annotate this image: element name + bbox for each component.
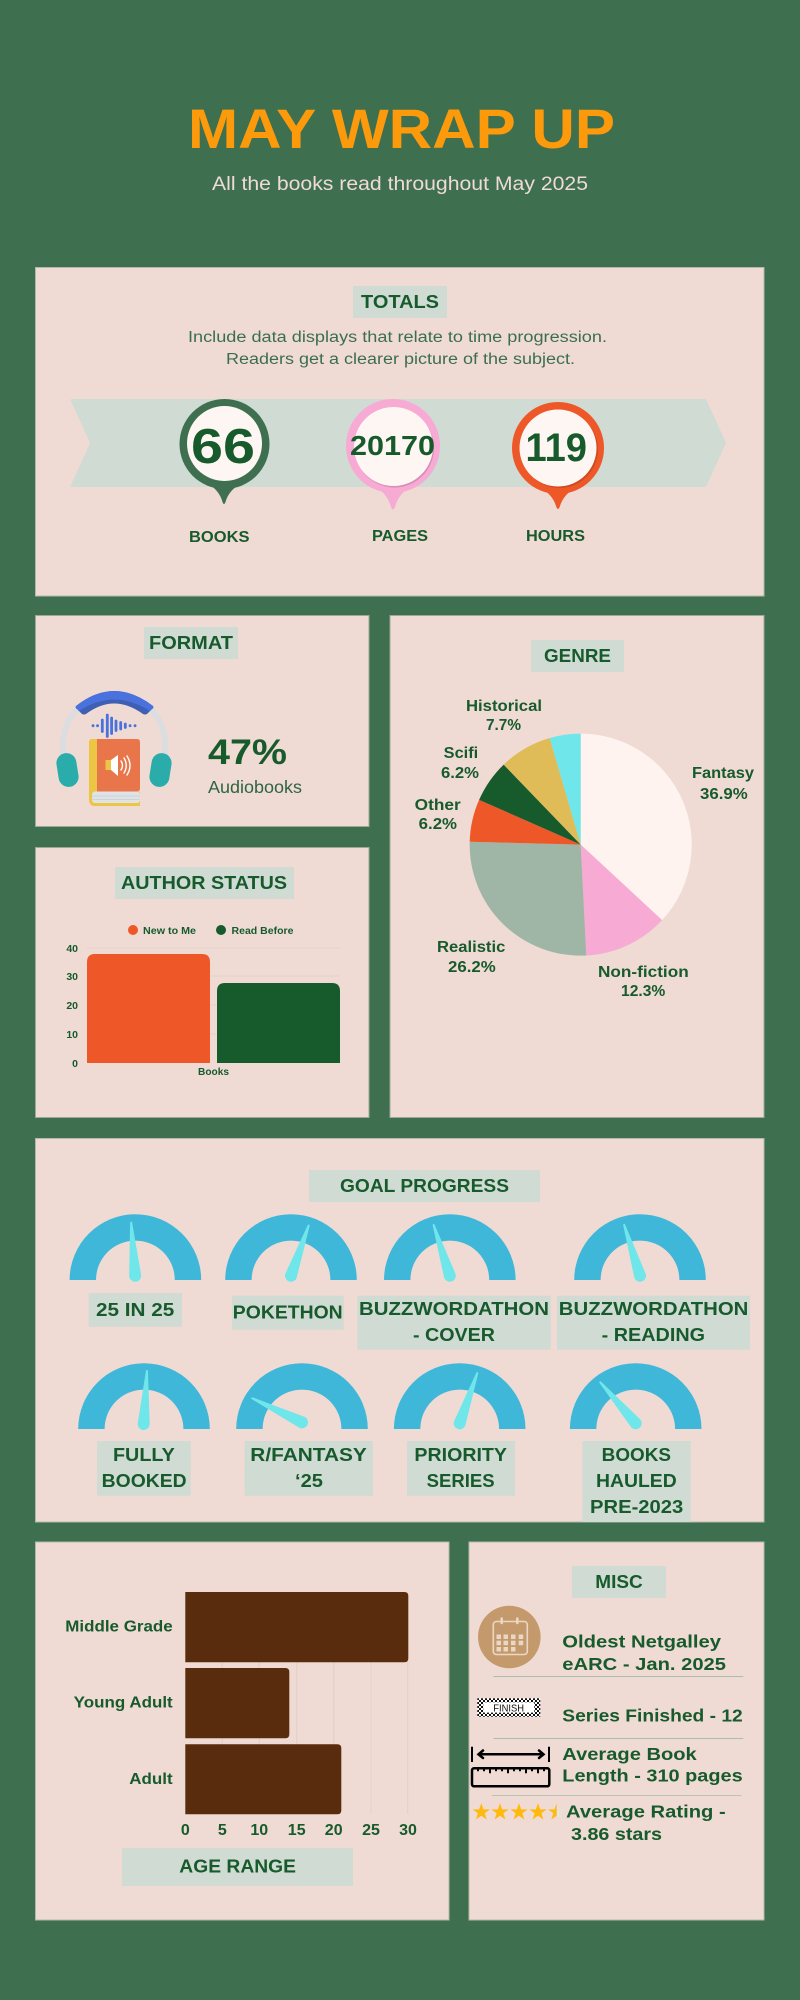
pie label: scifi: Scifi — [444, 745, 478, 762]
text: average book length: Average Book — [562, 1744, 697, 1764]
pie label: scifi: 6.2% — [441, 765, 479, 782]
bar chart: author status — [66, 943, 340, 1078]
label: buzzwordathon cover: - COVER — [413, 1325, 495, 1345]
bar chart: author status: 0 — [72, 1058, 78, 1070]
text: average rating: Average Rating - — [566, 1802, 726, 1822]
label: pokethon — [232, 1296, 344, 1330]
pie label: historical: 7.7% — [486, 717, 521, 734]
pie label: fantasy: 36.9% — [700, 786, 748, 803]
gauge: buzzwordathon reading — [574, 1214, 706, 1283]
text: average rating — [566, 1802, 726, 1844]
label: 25 in 25: 25 IN 25 — [96, 1300, 174, 1320]
bar chart: age range — [65, 1592, 417, 1839]
heading: age range — [122, 1848, 353, 1886]
text: average book length: Length - 310 pages — [562, 1766, 743, 1786]
pie label: non-fiction: 12.3% — [621, 983, 665, 1000]
panel: format — [36, 616, 369, 826]
icon: finish banner — [477, 1698, 540, 1717]
gauge: buzzwordathon cover — [384, 1214, 516, 1283]
stat: 47% audiobooks: 47% — [208, 733, 287, 772]
pie label: historical — [466, 698, 542, 734]
pin: pages — [346, 399, 440, 510]
label: fully booked: BOOKED — [102, 1471, 187, 1491]
bar chart: age range: 25 — [362, 1822, 380, 1839]
icon: audiobook with headphones — [55, 691, 173, 806]
gauge: pokethon — [225, 1214, 357, 1283]
bar chart: age range: 20 — [325, 1822, 343, 1839]
pie label: fantasy: Fantasy — [692, 765, 754, 782]
panel: genre — [390, 616, 764, 1118]
pin: hours: 119 — [526, 426, 587, 470]
stat: 47% audiobooks: Audiobooks — [208, 777, 302, 797]
chart legend — [128, 925, 294, 937]
gauge: priority series — [394, 1363, 526, 1431]
label: r/fantasy 25: ‘25 — [295, 1471, 323, 1491]
label: buzzwordathon reading: - READING — [602, 1325, 705, 1345]
description text: Readers get a clearer picture of the subject. — [226, 351, 575, 368]
panel: totals — [36, 268, 764, 596]
text: series finished: Series Finished - 12 — [562, 1706, 743, 1726]
label: books hauled pre-2023: HAULED — [596, 1471, 677, 1491]
bar chart: age range: 10 — [250, 1822, 268, 1839]
bar chart: age range: 15 — [288, 1822, 306, 1839]
heading: totals: TOTALS — [361, 292, 439, 312]
label: priority series: PRIORITY — [414, 1445, 507, 1465]
text: average book length — [562, 1744, 743, 1786]
bar chart: author status: 10 — [66, 1029, 78, 1041]
panel: author status — [36, 848, 369, 1118]
pie label: historical: Historical — [466, 698, 542, 715]
label: buzzwordathon reading — [557, 1296, 750, 1350]
heading: totals — [353, 286, 447, 318]
text: oldest netgalley — [562, 1632, 726, 1674]
text: average rating: 3.86 stars — [571, 1824, 662, 1844]
label: priority series: SERIES — [427, 1471, 495, 1491]
heading: goal progress: GOAL PROGRESS — [340, 1176, 509, 1196]
pie chart — [470, 734, 692, 956]
label: priority series — [407, 1441, 515, 1496]
text: oldest netgalley: eARC - Jan. 2025 — [562, 1654, 726, 1674]
label: hours: HOURS — [526, 528, 585, 545]
bar chart: author status: Books — [198, 1066, 229, 1078]
heading: genre: GENRE — [544, 646, 611, 666]
gauge: books hauled — [570, 1363, 702, 1432]
label: buzzwordathon cover: BUZZWORDATHON — [359, 1299, 549, 1319]
pie label: other — [415, 797, 461, 833]
pin: hours — [512, 402, 604, 509]
pin: books — [180, 399, 270, 504]
label: fully booked: FULLY — [113, 1445, 175, 1465]
pie label: non-fiction — [598, 964, 689, 1000]
stat: 47% audiobooks — [208, 733, 302, 797]
heading: goal progress — [309, 1170, 540, 1202]
pie label: realistic: 26.2% — [448, 959, 496, 976]
pie label: scifi — [441, 745, 479, 782]
label: r/fantasy 25: R/FANTASY — [250, 1445, 367, 1465]
bar chart: age range: Middle Grade — [65, 1619, 173, 1636]
description text — [188, 329, 607, 368]
bar chart: age range: Adult — [129, 1771, 173, 1788]
pie label: other: 6.2% — [419, 816, 457, 833]
icon: ruler with arrow — [472, 1747, 549, 1786]
heading: age range: AGE RANGE — [179, 1857, 296, 1877]
heading: author status — [115, 867, 294, 899]
heading: author status: AUTHOR STATUS — [121, 873, 287, 893]
bar chart: age range: 5 — [218, 1822, 227, 1839]
bar chart: age range: 0 — [181, 1822, 190, 1839]
title: MAY WRAP UP — [188, 97, 615, 160]
label: r/fantasy 25 — [245, 1441, 373, 1496]
label: pages: PAGES — [372, 528, 428, 545]
label: books hauled pre-2023 — [582, 1441, 691, 1522]
panel: age range — [36, 1542, 449, 1920]
panel: misc — [469, 1542, 764, 1920]
panel: goal progress — [36, 1138, 764, 1522]
gauge: r/fantasy 25 — [236, 1363, 368, 1430]
chart legend: New to Me — [143, 925, 196, 937]
pie label: non-fiction: Non-fiction — [598, 964, 689, 981]
label: fully booked — [97, 1441, 191, 1496]
bar chart: author status: 40 — [66, 943, 78, 955]
pie label: fantasy — [692, 765, 754, 803]
text: oldest netgalley: Oldest Netgalley — [562, 1632, 721, 1652]
icon: finish banner: FINISH — [493, 1702, 524, 1714]
bar chart: age range: 30 — [399, 1822, 417, 1839]
bar chart: author status: 20 — [66, 1000, 78, 1012]
icon: star rating — [473, 1803, 565, 1820]
label: buzzwordathon reading: BUZZWORDATHON — [559, 1299, 748, 1319]
label: pokethon: POKETHON — [233, 1302, 343, 1322]
description text: Include data displays that relate to time progression. — [188, 329, 607, 346]
label: books hauled pre-2023: PRE-2023 — [590, 1497, 683, 1517]
icon: calendar — [478, 1606, 541, 1668]
bar chart: age range: Young Adult — [74, 1695, 173, 1712]
gauge: 25 in 25 — [70, 1214, 201, 1282]
heading: format — [144, 627, 238, 659]
label: buzzwordathon cover — [357, 1296, 551, 1350]
pin: books: 66 — [191, 420, 255, 474]
heading: format: FORMAT — [149, 633, 233, 653]
timeline arrow band — [71, 399, 726, 487]
chart legend: Read Before — [232, 925, 294, 937]
label: books: BOOKS — [189, 529, 250, 546]
pie label: realistic: Realistic — [437, 939, 505, 956]
pie label: other: Other — [415, 797, 461, 814]
heading: misc — [572, 1566, 666, 1598]
label: 25 in 25 — [88, 1293, 182, 1327]
subtitle: All the books read throughout May 2025 — [212, 174, 588, 195]
bar chart: author status: 30 — [66, 971, 78, 983]
label: books hauled pre-2023: BOOKS — [602, 1445, 671, 1465]
pie label: realistic — [437, 939, 505, 976]
gauge: fully booked — [78, 1363, 210, 1430]
pin: pages: 20170 — [350, 430, 435, 461]
heading: genre — [531, 640, 624, 672]
heading: misc: MISC — [595, 1572, 643, 1592]
